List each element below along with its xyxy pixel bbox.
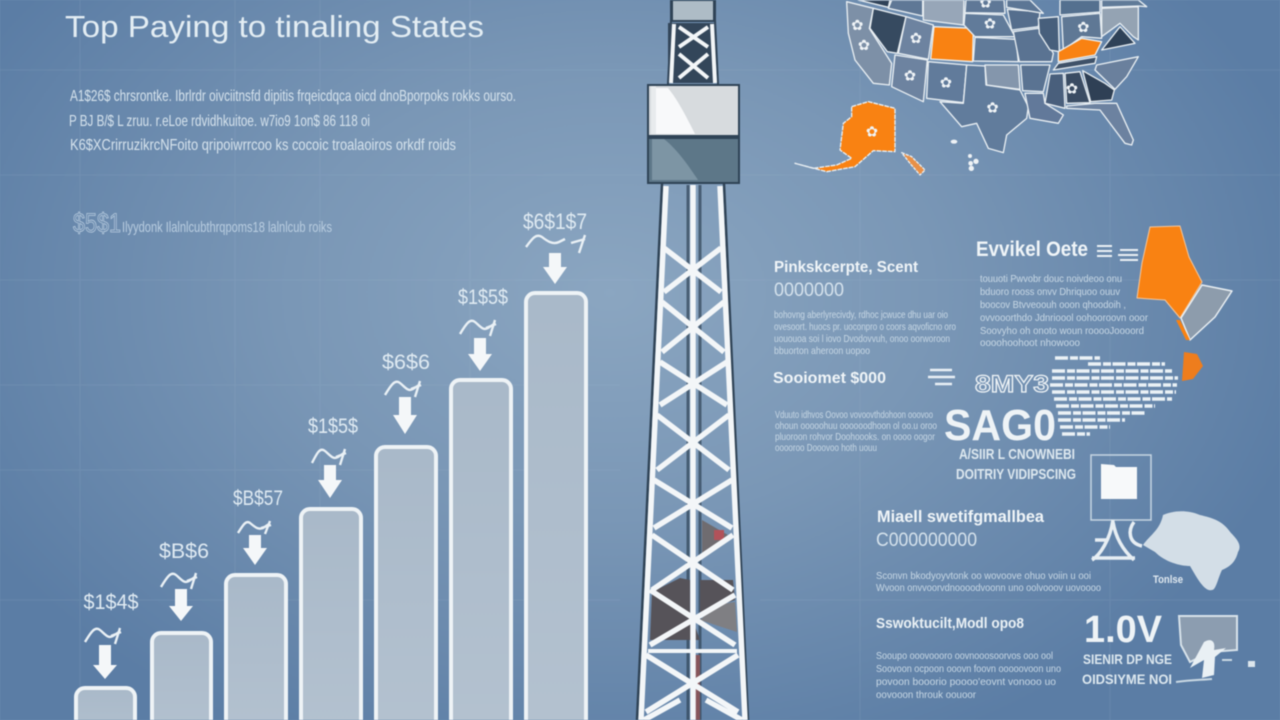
map tag: Tonlse [1153, 574, 1183, 586]
Hawaii islands [951, 140, 979, 171]
state markers: ✿ [987, 100, 999, 116]
tower machinery fill [650, 23, 737, 720]
body text: Wvoon onvvoorvdnoooodvoonn uno oolvooov uovoooo [876, 582, 1101, 594]
tower white lattice [641, 24, 745, 720]
orange southern area [1182, 352, 1203, 381]
caption [956, 446, 1076, 483]
bar 2: $B$6 [159, 540, 209, 563]
caption [1082, 651, 1172, 687]
state highlight dark: Virginia [1102, 27, 1135, 50]
state highlight: Kentucky [1058, 38, 1102, 62]
body text: touuoti Pwvobr douc noivdeoo onu [980, 273, 1122, 285]
icon: framed state on stand [1091, 455, 1151, 560]
state markers: ✿ [1066, 81, 1078, 97]
title: Top Paying to tinaling States [65, 9, 484, 44]
bar 7 [523, 209, 587, 720]
state markers: ✿ [904, 69, 916, 85]
top cap [672, 0, 714, 21]
body text: Sconvn bkodyoyvtonk oo wovoove ohuo voiin u ooi [876, 570, 1091, 582]
intro text block [69, 88, 516, 154]
value: SAG0 [944, 401, 1056, 450]
bar 3: $B$57 [233, 487, 283, 510]
state highlight: Wyoming [931, 27, 973, 62]
caption: A/SIIR L CNOWNEBI [959, 446, 1075, 463]
body text: Sooupo ooovoooro oovnooosoorvos ooo ool [876, 650, 1053, 662]
body text: povoon booorio poooo'eovnt vonooo uo [876, 676, 1056, 688]
state markers: ✿ [866, 125, 878, 141]
state markers: ✿ [858, 38, 870, 54]
state markers [851, 0, 1089, 141]
state markers: ✿ [851, 18, 863, 34]
bar 6: $1$5$ [458, 286, 508, 309]
southwest and plains states [892, 0, 1043, 153]
body text: ooooroo Dooovoo hoth uouu [775, 442, 877, 454]
body text: Vduuto idhvos Oovoo vovoovthdohoon ooovoo [775, 409, 933, 421]
illustration: drilling tower [637, 0, 748, 720]
bar 5 [376, 351, 436, 720]
heading: Sswoktucilt,Modl opo8 [876, 615, 1024, 632]
chart subtitle: $5$1 [73, 208, 121, 238]
northwest states [847, 0, 964, 85]
intro text block: A1$26$ chrsrontke. Ibrlrdr oivciitnsfd dipitis frqeicdqca oicd dnoBporpoks rokks ourso. [70, 88, 516, 105]
bar 3 [226, 487, 286, 720]
bar 1: $1$4$ [84, 591, 139, 614]
body text: oovooon throuk oouoor [876, 689, 976, 701]
number: 0000000 [774, 280, 844, 301]
central and southern states [1013, 0, 1147, 145]
US map [795, 0, 1147, 175]
caption: SIENIR DP NGE [1083, 651, 1172, 667]
body text: bbuorton aheroon uopoo [774, 345, 870, 357]
heading: Miaell swetifgmallbea [877, 507, 1045, 526]
left streaks [928, 370, 955, 384]
housing box [647, 84, 740, 184]
intro text block: P BJ B/$ L zruu. r.eLoe rdvidhkuitoe. w7io9 1on$ 86 118 oi [69, 113, 370, 130]
bar 7: $6$1$7 [523, 209, 587, 234]
bar 2 [152, 540, 211, 720]
bar 4: $1$5$ [308, 415, 358, 438]
bar 4 [301, 415, 361, 720]
intro text block: K6$XCrirruzikrcNFoito qripoiwrrcoo ks cocoic troalaoiros orkdf roids [70, 137, 456, 154]
state highlight: Alaska panhandle [902, 153, 925, 175]
grey state [1181, 285, 1232, 340]
bar 1 [76, 591, 139, 720]
orange state [1137, 226, 1202, 318]
number: C000000000 [876, 530, 977, 551]
chart subtitle [73, 208, 332, 238]
body text [876, 570, 1101, 594]
body text [980, 273, 1148, 349]
bar 6 [451, 286, 511, 720]
body text: ovvooorthdo Jdnrioool oohooroovn ooor [980, 312, 1148, 324]
caption: DOITRIY VIDIPSCING [956, 466, 1076, 483]
chart subtitle: Ilyydonk Ilalnlcubthrqpoms18 lalnlcub roiks [122, 219, 332, 236]
body text: ovesoort. huocs pr. uoconpro o coors aqvoficno oro [774, 321, 956, 333]
state markers: ✿ [940, 75, 952, 91]
state markers: ✿ [984, 17, 996, 33]
body text: uououoa soi l iovo Dvodovvuh, onoo oorworoon [774, 333, 950, 345]
caption: OIDSIYME NOI [1082, 671, 1172, 687]
stat: 1.0V [1082, 609, 1172, 687]
tower dark outline and inner pole [637, 0, 748, 720]
state markers: ✿ [910, 31, 922, 47]
map: eastern region [928, 226, 1232, 434]
body text: Soovyho oh onoto woun rooooJoooord [980, 325, 1144, 337]
body text [774, 309, 956, 357]
map: pale state [1143, 511, 1240, 590]
body text: bohovng aberlyrecivdy, rdhoc jcwuce dhu uar oio [774, 309, 948, 321]
icon: shaded state with figure [1176, 616, 1255, 682]
panel: section one [774, 259, 956, 357]
body text: ohoun ooooohuu oooooodhoon ol oo.u oroo [775, 420, 937, 432]
body text [876, 650, 1061, 701]
body text: Soovoon ocpoon ooovn foovn ooooovoon uno [876, 663, 1061, 675]
streaked coastline [1050, 358, 1178, 434]
value: 1.0V [1084, 609, 1163, 651]
bar chart [76, 209, 587, 720]
legend marks [1097, 246, 1138, 260]
panel: section four [876, 507, 1101, 594]
state markers: ✿ [1077, 20, 1089, 36]
garbled number: 8MY3 [975, 371, 1049, 398]
heading: Pinkskcerpte, Scent [774, 259, 919, 276]
state highlight: Alaska [795, 102, 895, 172]
panel: section two [773, 370, 937, 454]
body text: oooohoohoot nhowooo [980, 337, 1080, 349]
body text [775, 409, 937, 454]
panel: section five [876, 615, 1061, 701]
body text: bduoro rooss onvv Dhriquoo ouuv [980, 286, 1121, 298]
panel: section three [976, 238, 1148, 349]
heading: Evvikel Oete [976, 238, 1088, 261]
orange strip [1176, 320, 1190, 340]
bar 5: $6$6 [382, 351, 430, 374]
heading: Sooiomet $000 [773, 370, 886, 387]
body text: boocov Btvveoouh ooon qhoodoih , [980, 299, 1126, 311]
body text: pluoroon rohvor Doohoooks. on oooo oogor [775, 431, 935, 443]
big stat [944, 401, 1076, 483]
